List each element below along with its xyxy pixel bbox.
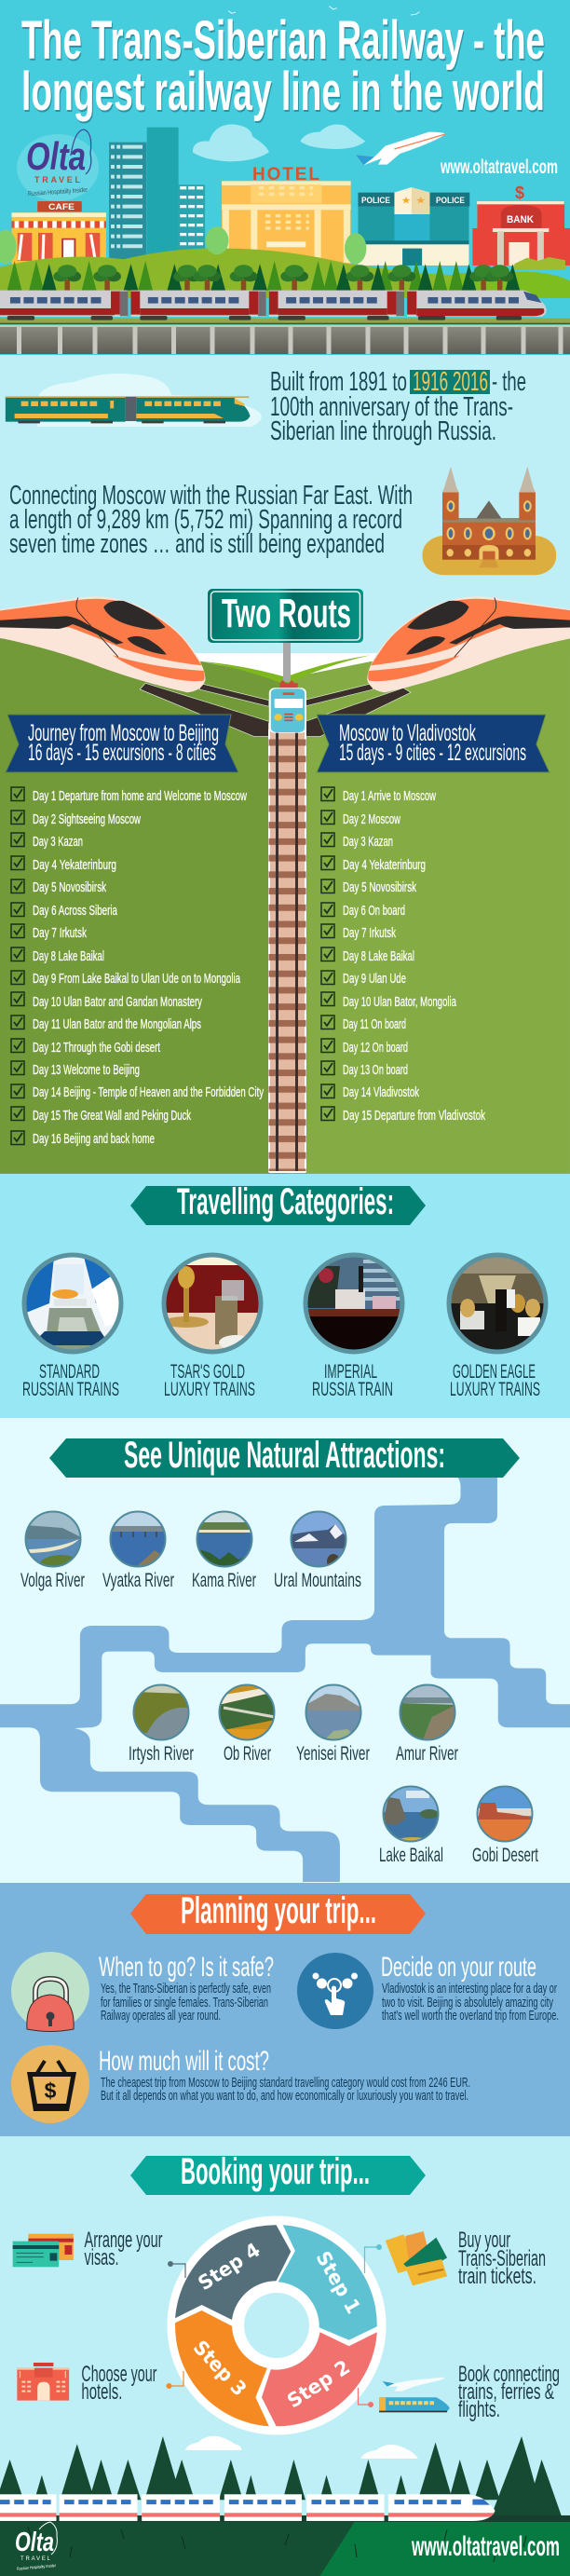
checklist: Vladivostok route: Day 12 On board (343, 1040, 408, 1056)
text: hotels: Choose your (81, 2362, 156, 2387)
attraction labels: Lake Baikal (379, 1845, 443, 1866)
text: connections (458, 2362, 560, 2422)
text: connections: flights. (458, 2397, 500, 2422)
heading (130, 1181, 426, 1225)
photo: Ural Mountains (291, 1511, 346, 1569)
attraction labels (20, 1570, 538, 1866)
icon: padlock (11, 1952, 89, 2031)
icon: green train (6, 396, 251, 423)
text: cost: How much will it cost? (99, 2046, 269, 2077)
step 1 segment (278, 2225, 377, 2340)
checklist: Beijing route: Day 2 Sightseeing Moscow (33, 811, 141, 827)
building signs: POLICE (361, 196, 390, 205)
text: cost (99, 2046, 470, 2104)
step wheel (168, 2215, 386, 2435)
checklist: Vladivostok route: Day 3 Kazan (343, 834, 393, 850)
photo: Ob River (219, 1684, 275, 1740)
step 2 segment: Step 2 (283, 2356, 354, 2412)
header illustration: city: ★ (415, 195, 426, 206)
text: visas: Arrange your (84, 2228, 162, 2253)
checklist: Vladivostok route: Day 14 Vladivostok (343, 1084, 419, 1100)
tracks (140, 683, 411, 737)
checklist: Vladivostok route (321, 787, 485, 1124)
photo: Amur River (400, 1684, 455, 1740)
panel: planning (11, 1890, 559, 2123)
ground (0, 2522, 570, 2576)
checklist: Vladivostok route: Day 13 On board (343, 1062, 408, 1078)
icon: basket (11, 2045, 89, 2123)
checklist: Beijing route: Day 6 Across Siberia (33, 903, 117, 919)
checklist: Beijing route: Day 12 Through the Gobi desert (33, 1040, 161, 1056)
text: built (270, 367, 526, 446)
building signs: HOTEL (252, 165, 319, 184)
text: built: 1916 2016 (413, 367, 488, 397)
attraction labels: Amur River (396, 1743, 458, 1765)
checklist: Beijing route: Day 13 Welcome to Beijing (33, 1062, 140, 1078)
panel: booking (13, 2151, 560, 2435)
footer logo: Russian Hospitality Insider (17, 2563, 57, 2571)
text: visas: visas. (84, 2245, 119, 2270)
panel: two routes (0, 589, 570, 1174)
photo: Irtysh River (133, 1684, 189, 1740)
panel: footer (0, 2436, 570, 2576)
checklist: Vladivostok route: Day 4 Yekaterinburg (343, 857, 426, 873)
panel: header (0, 7, 570, 354)
heading: Travelling Categories: (177, 1181, 394, 1222)
text: tickets: Buy your (458, 2228, 510, 2253)
attraction labels: Volga River (20, 1570, 85, 1591)
checklist: Vladivostok route: Day 11 On board (343, 1016, 406, 1032)
header illustration: city: ★ (401, 195, 412, 206)
right train head (367, 596, 570, 692)
category labels: RUSSIAN TRAINS (22, 1379, 119, 1400)
panel: intro (6, 367, 556, 575)
checklist: Beijing route: Day 9 From Lake Baikal to Ulan Ude on to Mongolia (33, 971, 240, 987)
logo (17, 129, 99, 201)
text: decide route (381, 1952, 559, 2024)
icon: tickets (386, 2231, 447, 2285)
icon: front-view train (269, 681, 306, 733)
category labels: RUSSIA TRAIN (312, 1379, 393, 1400)
checklist: Beijing route: Day 10 Ulan Bator and Gandan Monastery (33, 994, 202, 1010)
photo: Gobi Desert (477, 1786, 533, 1842)
icon: hand route (297, 1953, 373, 2029)
text: connecting (9, 481, 413, 559)
bridge (0, 325, 570, 354)
river (0, 1475, 570, 1882)
checklist: Vladivostok route: Day 6 On board (343, 903, 405, 919)
icon: hotel (17, 2363, 69, 2401)
text: built: Built from 1891 to (270, 367, 407, 397)
step 4 segment (175, 2225, 291, 2320)
checklist: Beijing route: Day 15 The Great Wall and Peking Duck (33, 1108, 191, 1124)
heading: Booking your trip... (181, 2151, 370, 2192)
header illustration: city (0, 7, 570, 298)
category labels: IMPERIAL (324, 1361, 377, 1383)
step 3 segment (175, 2310, 269, 2426)
footer logo: TRAVEL (20, 2556, 51, 2562)
title (21, 10, 545, 122)
checklist: Beijing route: Day 5 Novosibirsk (33, 879, 106, 895)
ribbon: Moscow to Beijing: 16 days - 15 excursions - 8 cities (28, 740, 216, 766)
checklist: Vladivostok route: Day 2 Moscow (343, 811, 400, 827)
category labels: LUXURY TRAINS (164, 1379, 255, 1400)
photo: tsar's gold (164, 1255, 261, 1352)
attraction labels: Ural Mountains (274, 1570, 361, 1591)
icon: basket: $ (45, 2079, 57, 2103)
checklist: Beijing route: Day 4 Yekaterinburg (33, 857, 116, 873)
text: tickets (458, 2228, 546, 2289)
left train head (0, 596, 206, 692)
photo: Vyatka River (110, 1511, 166, 1567)
checklist: Beijing route: Day 14 Beijing - Temple of Heaven and the Forbidden City (33, 1084, 264, 1100)
panel: travelling categories (22, 1181, 546, 1400)
checklist: Beijing route: Day 8 Lake Baikal (33, 948, 104, 964)
heading: Planning your trip... (181, 1890, 376, 1931)
photo: Kama River (197, 1511, 252, 1567)
photo: standard train (24, 1255, 121, 1352)
text: when to go: When to go? Is it safe? (99, 1952, 274, 1983)
heading (130, 2151, 426, 2195)
sign: two routs (208, 589, 363, 682)
checklist: Beijing route (11, 787, 264, 1147)
panel: natural attractions (0, 1435, 570, 1882)
icon: church (423, 467, 556, 575)
step 1 segment: Step 1 (311, 2247, 365, 2318)
text: when to go: Yes, the Trans-Siberian is perfectly safe, even (101, 1982, 271, 1997)
text: when to go: for families or single females. Trans-Siberian (101, 1996, 268, 2010)
text: when to go (99, 1952, 274, 2024)
photo: imperial (305, 1255, 402, 1352)
checklist: Vladivostok route: Day 15 Departure from Vladivostok (343, 1108, 485, 1124)
category labels: TSAR'S GOLD (170, 1361, 245, 1383)
heading (130, 1890, 426, 1934)
checklist: Vladivostok route: Day 7 Irkutsk (343, 925, 396, 941)
text: built: - the (492, 367, 526, 397)
railway line (268, 722, 306, 1173)
photo: Volga River (24, 1511, 82, 1567)
checklist: Beijing route: Day 3 Kazan (33, 834, 83, 850)
attraction labels: Kama River (192, 1570, 256, 1591)
logo: TRAVEL (34, 175, 80, 184)
connectors (166, 2244, 382, 2407)
building signs (48, 165, 534, 225)
checklist: Vladivostok route: Day 5 Novosibirsk (343, 879, 416, 895)
cloud behind green train (37, 374, 262, 427)
attraction labels: Ob River (224, 1743, 271, 1765)
attraction labels: Irtysh River (129, 1743, 194, 1765)
ribbon: Moscow to Beijing: Journey from Moscow to Beijing (28, 720, 219, 746)
icon: plane and train (379, 2378, 450, 2412)
attraction labels: Vyatka River (102, 1570, 174, 1591)
building signs: POLICE (436, 196, 465, 205)
forest and train (0, 2436, 570, 2522)
text: hotels: hotels. (81, 2379, 122, 2405)
checklist: Beijing route: Day 7 Irkutsk (33, 925, 87, 941)
step 4 segment: Step 4 (194, 2239, 265, 2295)
checklist: Beijing route: Day 11 Ulan Bator and the Mongolian Alps (33, 1016, 201, 1032)
green ground (0, 638, 570, 1174)
step 3 segment: Step 3 (189, 2336, 251, 2401)
text: connecting: seven time zones … and is still being expanded (9, 529, 385, 559)
checklist: Beijing route: Day 16 Beijing and back home (33, 1131, 155, 1147)
logo: Olta (26, 134, 86, 178)
step 2 segment (262, 2332, 377, 2426)
category labels (22, 1361, 540, 1400)
logo: Russian Hospitality Insider (28, 187, 88, 198)
building signs: $ (515, 184, 524, 202)
sign: two routs: Two Routs (222, 591, 351, 636)
photo: Lake Baikal (383, 1786, 439, 1843)
header train (0, 291, 570, 324)
attraction labels: Yenisei River (296, 1743, 370, 1765)
category labels: STANDARD (39, 1361, 100, 1383)
checklist: Vladivostok route: Day 10 Ulan Bator, Mongolia (343, 994, 456, 1010)
building signs: BANK (507, 214, 534, 225)
text: when to go: Railway operates all year round. (101, 2009, 221, 2024)
checklist: Vladivostok route: Day 9 Ulan Ude (343, 971, 406, 987)
text: hotels (81, 2362, 156, 2405)
icon: visas (13, 2234, 74, 2267)
ribbon: Moscow to Vladivostok: Moscow to Vladivostok (339, 720, 476, 746)
photo: golden eagle (449, 1255, 546, 1352)
footer logo: Olta (15, 2528, 54, 2557)
checklist: Vladivostok route: Day 1 Arrive to Moscow (343, 788, 436, 804)
ribbon: Moscow to Vladivostok (317, 715, 550, 772)
building signs: CAFE (48, 202, 75, 212)
checklist: Vladivostok route: Day 8 Lake Baikal (343, 948, 414, 964)
photo: Yenisei River (305, 1684, 361, 1740)
text: visas (84, 2228, 162, 2270)
footer logo (15, 2522, 57, 2571)
checklist: Beijing route: Day 1 Departure from home and Welcome to Moscow (33, 788, 247, 804)
ribbon: Moscow to Beijing (6, 715, 238, 772)
